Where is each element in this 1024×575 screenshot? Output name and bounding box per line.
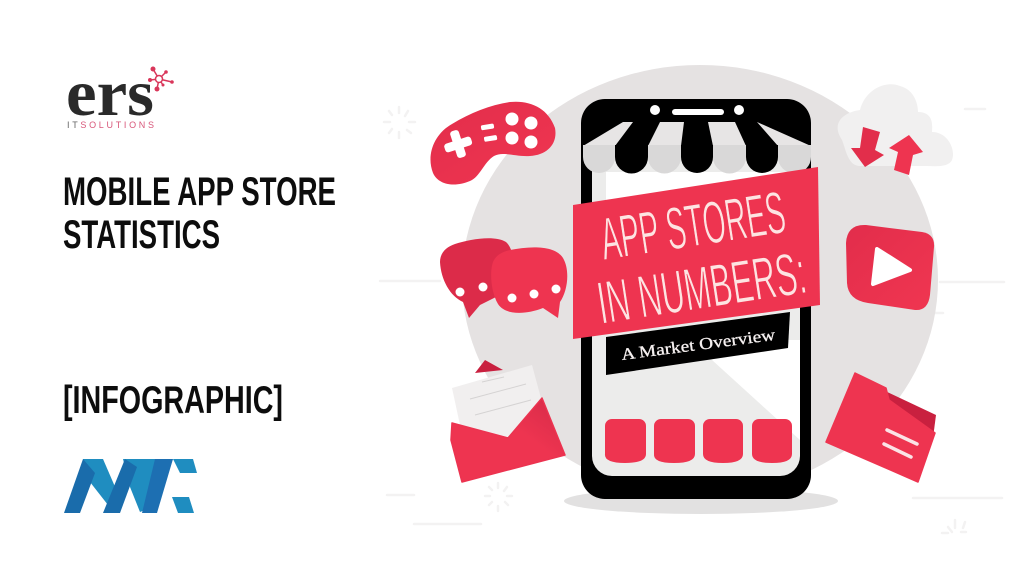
phone body — [581, 99, 811, 499]
icon: folder — [826, 373, 936, 482]
red headline banner: IN NUMBERS: — [593, 239, 811, 337]
title — [63, 170, 336, 257]
icon: chat bubbles — [440, 238, 567, 318]
decorative sparkles — [384, 107, 966, 533]
black sub-banner — [606, 312, 790, 375]
decorative faint lines — [380, 109, 1004, 524]
black sub-banner: A Market Overview — [620, 325, 776, 364]
icon: video play button — [846, 225, 934, 310]
phone screen — [592, 150, 800, 476]
red headline banner: APP STORES — [596, 178, 790, 273]
store awning — [583, 122, 811, 174]
phone notch — [650, 105, 744, 115]
phone shadow — [564, 488, 838, 514]
subtitle: infographic tag: [INFOGRAPHIC] — [63, 379, 283, 422]
background grey disc — [462, 65, 938, 495]
phone — [581, 99, 811, 499]
logo: ERS IT Solutions: IT SOLUTIONS — [67, 120, 154, 130]
logo: MTC — [64, 459, 197, 513]
title: MOBILE APP STORE — [63, 170, 336, 214]
icon: envelope with letter — [451, 360, 565, 482]
red headline banner — [573, 167, 820, 339]
logo: ERS IT Solutions: ers — [66, 57, 154, 130]
screen highlight — [606, 172, 800, 440]
icon: game controller — [430, 102, 555, 185]
app tiles — [605, 419, 792, 463]
icon: cloud with transfer arrows — [838, 84, 953, 175]
title: STATISTICS — [63, 213, 220, 257]
